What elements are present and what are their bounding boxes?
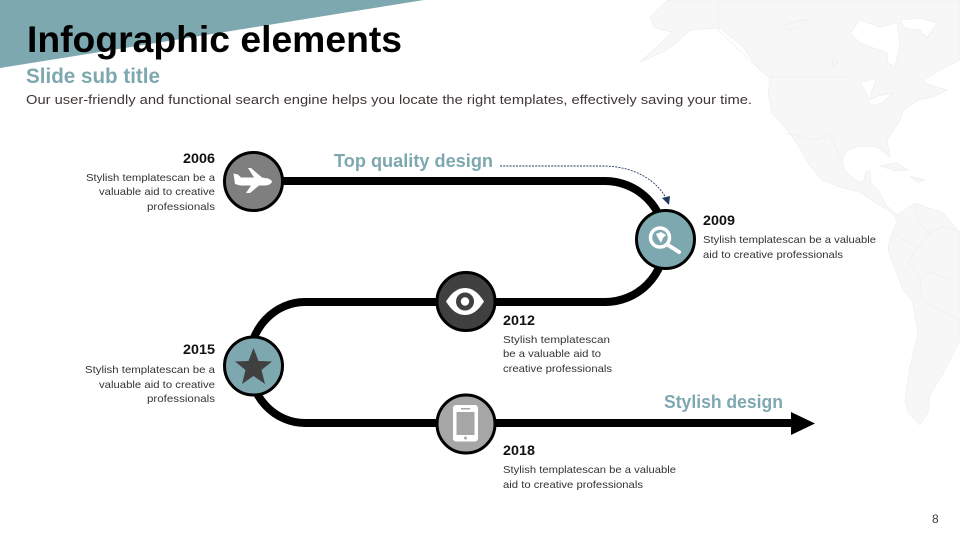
- text 2018: Stylish templatescan be a valuable: [503, 464, 676, 476]
- text 2015: [85, 341, 215, 405]
- arrow head: [791, 412, 815, 435]
- node 2018: phone icon: [437, 395, 495, 453]
- text 2018: aid to creative professionals: [503, 479, 643, 491]
- text 2006: 2006: [183, 150, 215, 166]
- text 2012: be a valuable aid to: [503, 348, 601, 360]
- node 2006: plane icon: [224, 152, 282, 210]
- text 2009: Stylish templatescan be a valuable: [703, 234, 876, 246]
- text 2009: aid to creative professionals: [703, 249, 843, 261]
- text 2006: professionals: [147, 201, 215, 213]
- text 2009: [703, 212, 876, 261]
- node 2009: magnifier icon: [636, 210, 694, 268]
- text 2018: 2018: [503, 442, 535, 458]
- text 2012: creative professionals: [503, 363, 612, 375]
- node 2012: eye icon: [437, 272, 495, 330]
- heading: top quality design: Top quality design: [334, 151, 493, 171]
- text 2012: Stylish templatescan: [503, 334, 610, 346]
- text 2015: valuable aid to creative: [99, 379, 215, 391]
- background world map: [640, 0, 960, 425]
- top-left teal banner: [0, 0, 424, 68]
- title: Infographic elements: [27, 19, 402, 60]
- page number: 8: [932, 512, 939, 526]
- text 2015: 2015: [183, 341, 215, 357]
- text 2009: 2009: [703, 212, 735, 228]
- text 2018: [503, 442, 676, 491]
- text 2015: Stylish templatescan be a: [85, 364, 215, 376]
- text 2006: Stylish templatescan be a: [86, 172, 215, 184]
- text 2006: valuable aid to creative: [99, 186, 215, 198]
- description: Our user-friendly and functional search engine helps you locate the right templates, effectively saving your time.: [26, 92, 752, 107]
- subtitle: Slide sub title: [26, 65, 160, 88]
- text 2012: 2012: [503, 312, 535, 328]
- text 2012: [503, 312, 612, 375]
- heading: stylish design: Stylish design: [664, 392, 783, 412]
- node 2015: star icon: [224, 337, 282, 395]
- dashed callout arrow: [500, 166, 670, 205]
- text 2006: [86, 150, 215, 213]
- text 2015: professionals: [147, 393, 215, 405]
- timeline path: [249, 181, 795, 423]
